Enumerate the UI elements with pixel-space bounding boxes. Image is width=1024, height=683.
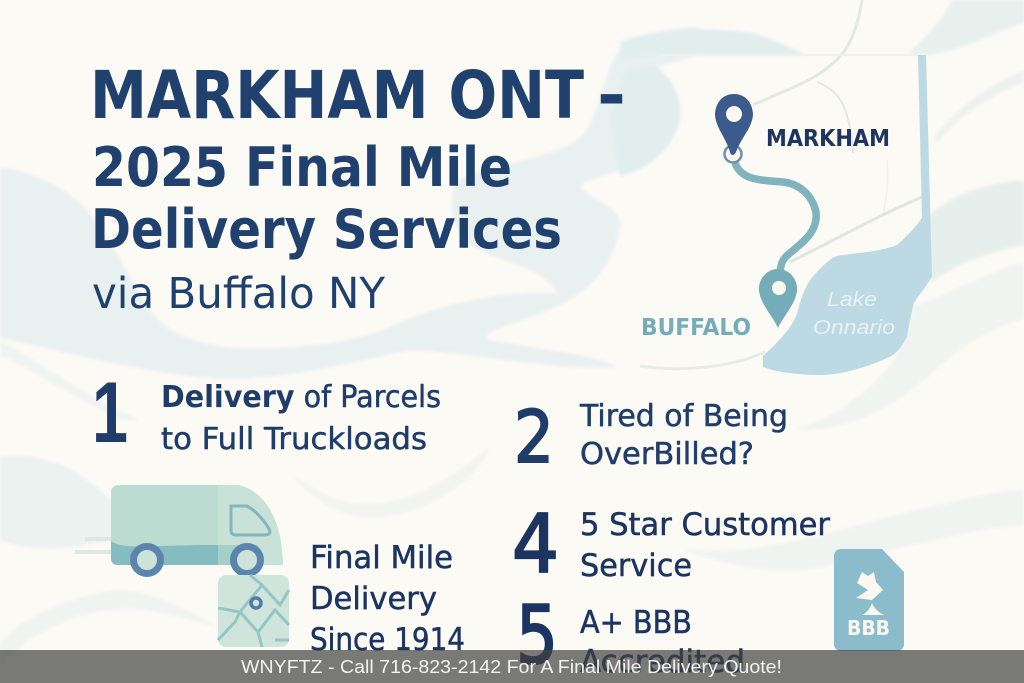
icon: delivery truck xyxy=(75,485,283,574)
map roads xyxy=(640,0,925,369)
item 2 xyxy=(514,395,788,479)
label: Buffalo: BUFFALO xyxy=(641,315,751,341)
item 5 xyxy=(516,589,745,682)
title: Delivery Services xyxy=(91,198,562,261)
text: final mile: Since 1914 xyxy=(310,622,465,658)
text: final mile: Delivery xyxy=(310,581,437,617)
item 4 xyxy=(512,498,830,591)
item 1: 1 xyxy=(92,365,128,461)
title: via Buffalo NY xyxy=(92,269,386,319)
route xyxy=(735,163,816,272)
panel: map xyxy=(640,0,932,375)
title xyxy=(90,57,626,319)
title: MARKHAM ONT xyxy=(90,57,584,134)
footer bar: WNYFTZ - Call 716-823-2142 For A Final Mile Delivery Quote! xyxy=(241,657,782,677)
title: 2025 Final Mile xyxy=(92,136,512,199)
pin: Buffalo xyxy=(759,269,797,328)
icon: BBB badge: BBB xyxy=(847,616,890,640)
label: Lake Ontario: Lake xyxy=(827,289,877,311)
label: Markham: MARKHAM xyxy=(766,126,890,152)
item 1: Delivery of Parcels xyxy=(161,380,441,415)
item 1 xyxy=(92,365,441,461)
text: final mile xyxy=(310,540,465,658)
label: Lake Ontario: Onnario xyxy=(813,317,895,339)
item 5: 5 xyxy=(516,589,558,682)
item 4: 4 xyxy=(512,498,559,591)
title: - xyxy=(597,57,626,134)
item 5: Accredited xyxy=(580,644,745,680)
pin: Markham xyxy=(715,94,753,162)
item 5: A+ BBB xyxy=(580,605,692,641)
icon: BBB badge xyxy=(834,549,904,651)
text: final mile: Final Mile xyxy=(310,540,453,576)
item 4: Service xyxy=(580,548,692,584)
item 4: 5 Star Customer xyxy=(580,507,830,543)
icon: map tile xyxy=(218,575,289,647)
item 2: OverBilled? xyxy=(580,437,754,472)
map lake and boundary xyxy=(763,55,932,375)
footer bar xyxy=(0,650,1024,683)
item 2: Tired of Being xyxy=(579,399,788,434)
item 2: 2 xyxy=(514,395,554,479)
label: Lake Ontario xyxy=(813,289,895,339)
item 1: to Full Truckloads xyxy=(161,422,427,457)
